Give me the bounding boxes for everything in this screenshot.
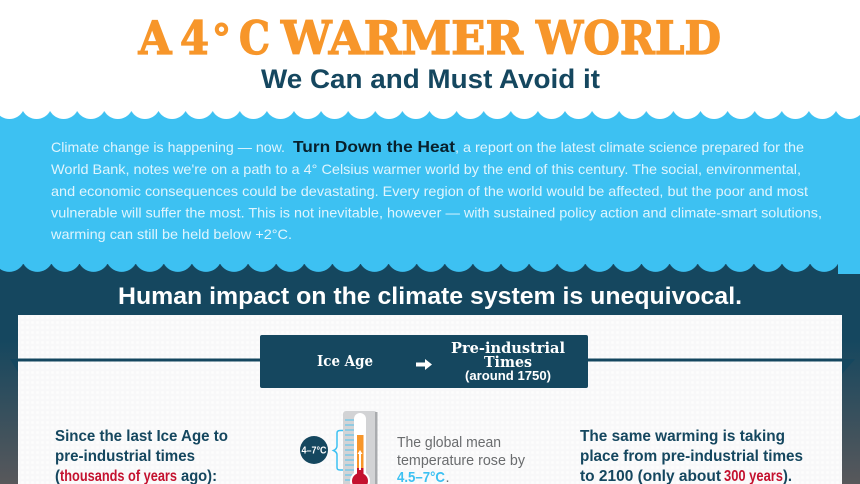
text block: same warming: The same warming is taking (580, 428, 785, 445)
text block: intro paragraph: World Bank, notes we're on a path to a 4° Celsius warmer world by the end of this century. The social, environmental, (51, 161, 801, 177)
label: pre-industrial times: (around 1750) (465, 369, 551, 383)
timeline box (260, 335, 588, 388)
panel: blue intro band (0, 111, 860, 274)
text block: since the last ice age: Since the last Ice Age to (55, 428, 228, 445)
text block: intro paragraph: and economic consequences could be devastating. Every region of the world would be affected, but the poor and most (51, 183, 808, 199)
label: ice age: Ice Age (317, 352, 373, 370)
text block: intro paragraph: Turn Down the Heat (293, 139, 455, 156)
title: ° (212, 16, 231, 61)
icon: thermometer (343, 411, 378, 484)
ribbon line with folded ends (10, 358, 855, 374)
text block: intro paragraph: vulnerable will suffer the most. This is not inevitable, however — with sustained policy action and climate-smart solutions, (51, 204, 822, 220)
title (138, 11, 721, 65)
title: 4 (180, 11, 209, 65)
text block: global mean temperature (397, 435, 526, 484)
background: dark lower section (0, 262, 860, 484)
text block: same warming: place from pre-industrial times (580, 448, 803, 465)
text block: same warming (580, 428, 803, 484)
text block: since the last ice age: pre-industrial times (55, 448, 195, 465)
title: C (239, 11, 270, 65)
title: WARMER (280, 11, 524, 65)
label: pre-industrial times: Pre-industrial (451, 339, 565, 357)
label: pre-industrial times (451, 339, 565, 383)
text block: intro paragraph (50, 139, 822, 242)
title: A (138, 11, 173, 65)
icon: arrow (416, 359, 432, 370)
text block: global mean temperature: The global mean (397, 435, 501, 451)
heading: human impact: Human impact on the climate system is unequivocal. (118, 283, 742, 310)
text block: intro paragraph: warming can still be held below +2°C. (50, 226, 292, 242)
background: white header (0, 0, 860, 112)
text block: intro paragraph: Climate change is happening — now. (51, 139, 285, 155)
title: WORLD (535, 11, 721, 65)
badge: 4-7°C (300, 436, 328, 464)
text block: intro paragraph: , a report on the latest climate science prepared for the (455, 139, 804, 155)
text block: since the last ice age (55, 428, 228, 484)
badge: 4-7°C: 4–7°C (302, 446, 326, 456)
subtitle: We Can and Must Avoid it (261, 64, 600, 94)
text block: global mean temperature: temperature rose by (397, 453, 526, 469)
panel: white dotted content (18, 315, 842, 484)
icon: bracket (334, 430, 343, 470)
label: pre-industrial times: Times (484, 353, 532, 371)
